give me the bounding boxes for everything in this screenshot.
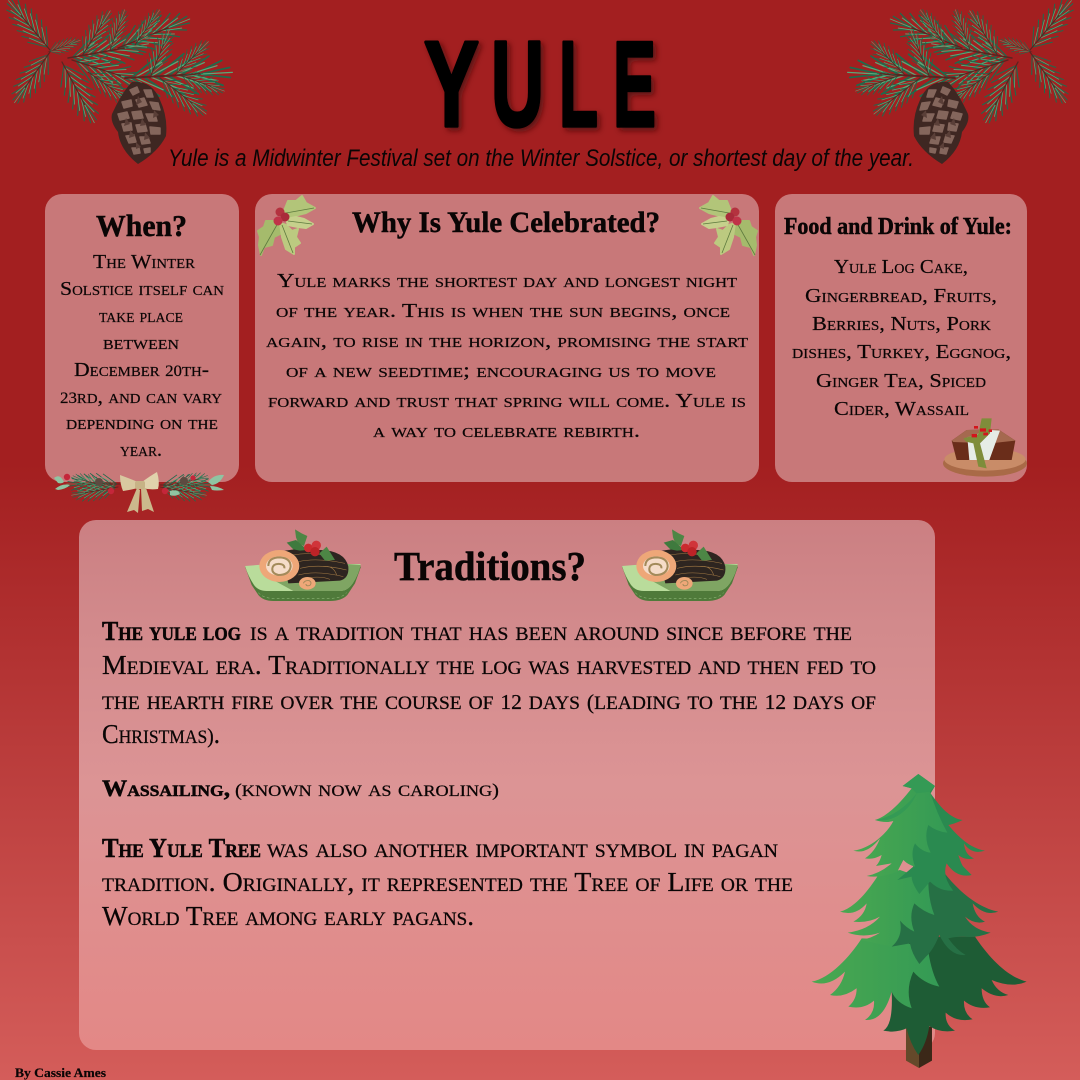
text: when body: December 20th- bbox=[74, 359, 209, 381]
panel: when bbox=[45, 194, 239, 482]
text: why body: again, to rise in the horizon, promising the start bbox=[266, 330, 749, 352]
title: Y bbox=[424, 16, 479, 152]
bottom tier bbox=[812, 937, 1027, 1055]
icon: yule log left bbox=[245, 529, 361, 601]
text: why body: of the year. This is when the sun begins, once bbox=[276, 300, 730, 322]
icon: pine cone bbox=[112, 82, 166, 164]
text: when body: 23rd, and can vary bbox=[60, 386, 222, 408]
text: food list: Cider, Wassail bbox=[834, 398, 969, 420]
text: why body: of a new seedtime; encouraging us to move bbox=[286, 360, 716, 382]
icon: yule tree bbox=[812, 774, 1027, 1068]
title: U bbox=[491, 16, 544, 152]
title bbox=[424, 16, 656, 152]
text: yule tree bbox=[102, 833, 793, 931]
icon: cake on plate bbox=[943, 418, 1027, 477]
heading: why: Why Is Yule Celebrated? bbox=[352, 206, 660, 239]
text: yule log: Medieval era. Traditionally the log was harvested and then fed to bbox=[102, 650, 876, 680]
middle tier bbox=[840, 870, 998, 964]
title: E bbox=[613, 16, 656, 152]
subtitle: Yule is a Midwinter Festival set on the Winter Solstice, or shortest day of the year. bbox=[168, 145, 914, 172]
icon: pine branch left bbox=[0, 0, 233, 164]
text: why body: a way to celebrate rebirth. bbox=[373, 420, 640, 442]
text: food list: Berries, Nuts, Pork bbox=[812, 313, 991, 335]
icon: yule log right bbox=[622, 529, 738, 601]
text: when body bbox=[60, 251, 224, 461]
text: food list: Ginger Tea, Spiced bbox=[816, 370, 986, 392]
text: food list: dishes, Turkey, Eggnog, bbox=[792, 341, 1011, 363]
text: yule log: is a tradition that has been around since before the bbox=[250, 616, 852, 646]
text: why body: forward and trust that spring will come. Yule is bbox=[268, 390, 746, 412]
top tier bbox=[853, 774, 985, 894]
text: yule log: The yule log bbox=[102, 616, 241, 646]
text: when body: Solstice itself can bbox=[60, 278, 224, 300]
text: when body: The Winter bbox=[93, 251, 196, 273]
icon: holly right bbox=[700, 196, 757, 255]
text: yule log: Christmas). bbox=[102, 719, 220, 749]
text: food list: Gingerbread, Fruits, bbox=[805, 285, 997, 307]
text: when body: take place bbox=[99, 305, 183, 327]
panel: food and drink bbox=[775, 194, 1027, 482]
text: wassailing bbox=[102, 776, 499, 801]
text: food list bbox=[792, 256, 1011, 420]
icon: garland with bow bbox=[54, 470, 224, 513]
text: yule tree: tradition. Originally, it represented the Tree of Life or the bbox=[102, 867, 793, 897]
heading: traditions: Traditions? bbox=[394, 543, 586, 589]
text: yule log bbox=[102, 616, 876, 749]
heading: food and drink: Food and Drink of Yule: bbox=[784, 214, 1012, 240]
icon: pine branch right bbox=[847, 0, 1080, 164]
text: when body: year. bbox=[120, 439, 162, 461]
text: food list: Yule Log Cake, bbox=[834, 256, 968, 278]
text: yule tree: World Tree among early pagans. bbox=[102, 901, 474, 931]
text: why body bbox=[266, 270, 749, 442]
text: when body: between bbox=[103, 332, 179, 354]
text: yule tree: The Yule Tree bbox=[102, 833, 261, 863]
title: L bbox=[559, 16, 598, 152]
text: wassailing: (known now as caroling ) bbox=[235, 776, 499, 801]
panel: traditions bbox=[79, 520, 935, 1050]
text: yule log: the hearth fire over the course of 12 days (leading to the 12 days of bbox=[102, 685, 876, 715]
text: wassailing: Wassailing, bbox=[102, 776, 230, 801]
panel: why bbox=[255, 194, 759, 482]
heading: when: When? bbox=[96, 208, 187, 243]
credit: By Cassie Ames bbox=[15, 1065, 106, 1080]
text: why body: Yule marks the shortest day and longest night bbox=[277, 270, 738, 292]
icon: holly left bbox=[258, 196, 315, 255]
text: when body: depending on the bbox=[66, 412, 218, 434]
text: yule tree: was also another important symbol in pagan bbox=[267, 833, 778, 863]
